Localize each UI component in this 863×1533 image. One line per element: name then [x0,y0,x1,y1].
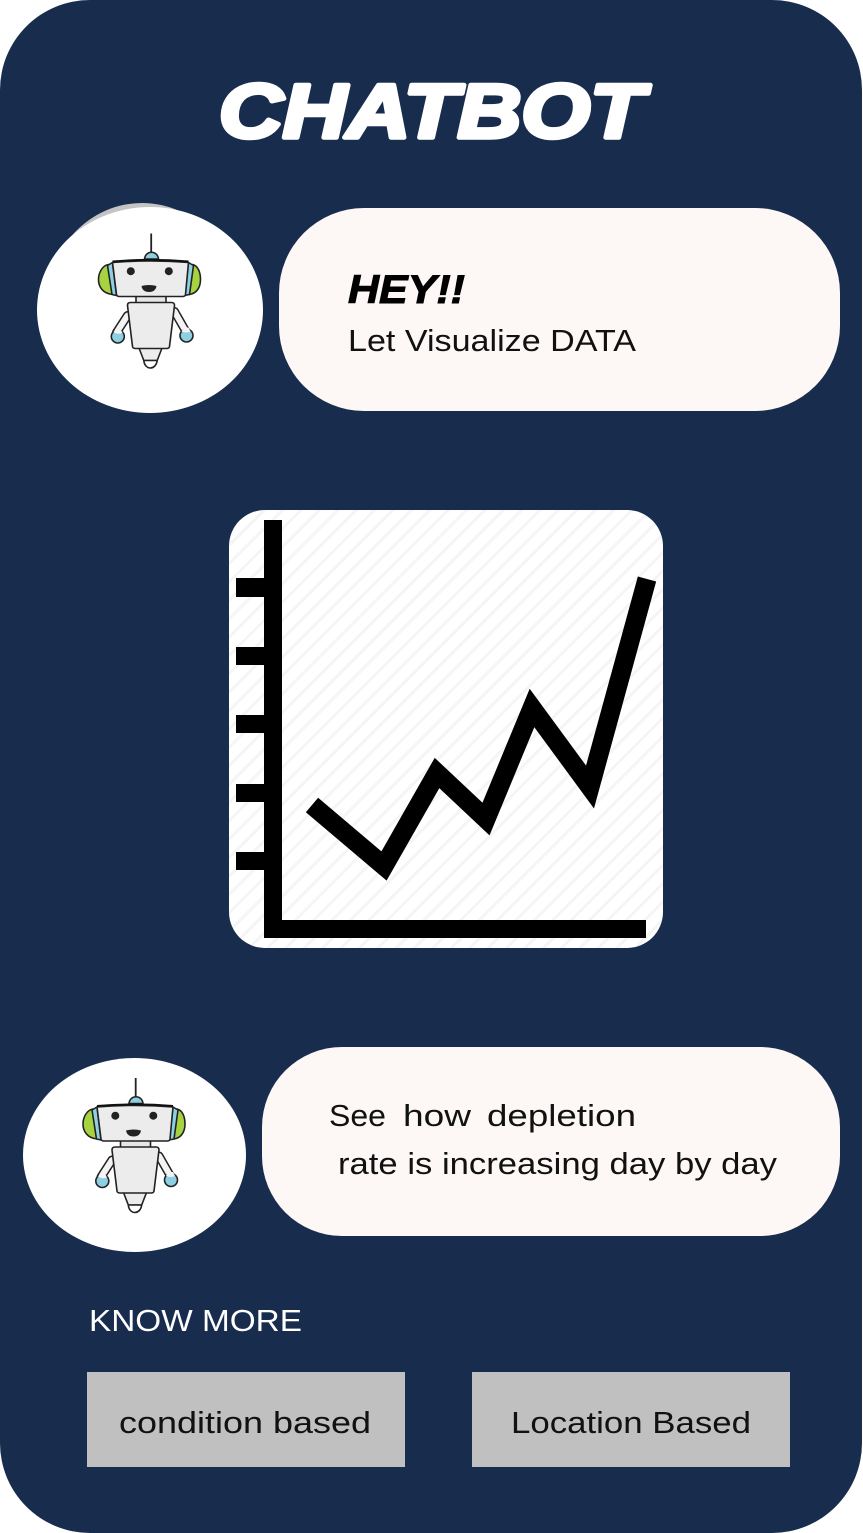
panel: line chart [229,510,663,948]
message line one [329,1098,636,1133]
chart axes and ticks [236,520,646,938]
avatar: second robot [23,1058,246,1252]
message line one: depletion [487,1098,636,1133]
avatar: first robot [37,203,263,413]
button: condition based [87,1372,405,1467]
message line two: rate is increasing day by day [338,1146,778,1181]
button: location based [472,1372,790,1467]
speech bubble: greeting [279,208,840,411]
greeting heading: HEY!! [348,268,465,312]
greeting text: Let Visualize DATA [348,323,636,358]
button: location based: Location Based [511,1405,751,1440]
speech bubble: depletion message [262,1047,840,1236]
know more label: KNOW MORE [89,1303,302,1338]
message line one: See [329,1098,386,1133]
title: CHATBOT [219,70,650,154]
button: condition based: condition based [119,1405,371,1440]
message line one: how [403,1098,472,1133]
chart trend line [312,579,647,866]
